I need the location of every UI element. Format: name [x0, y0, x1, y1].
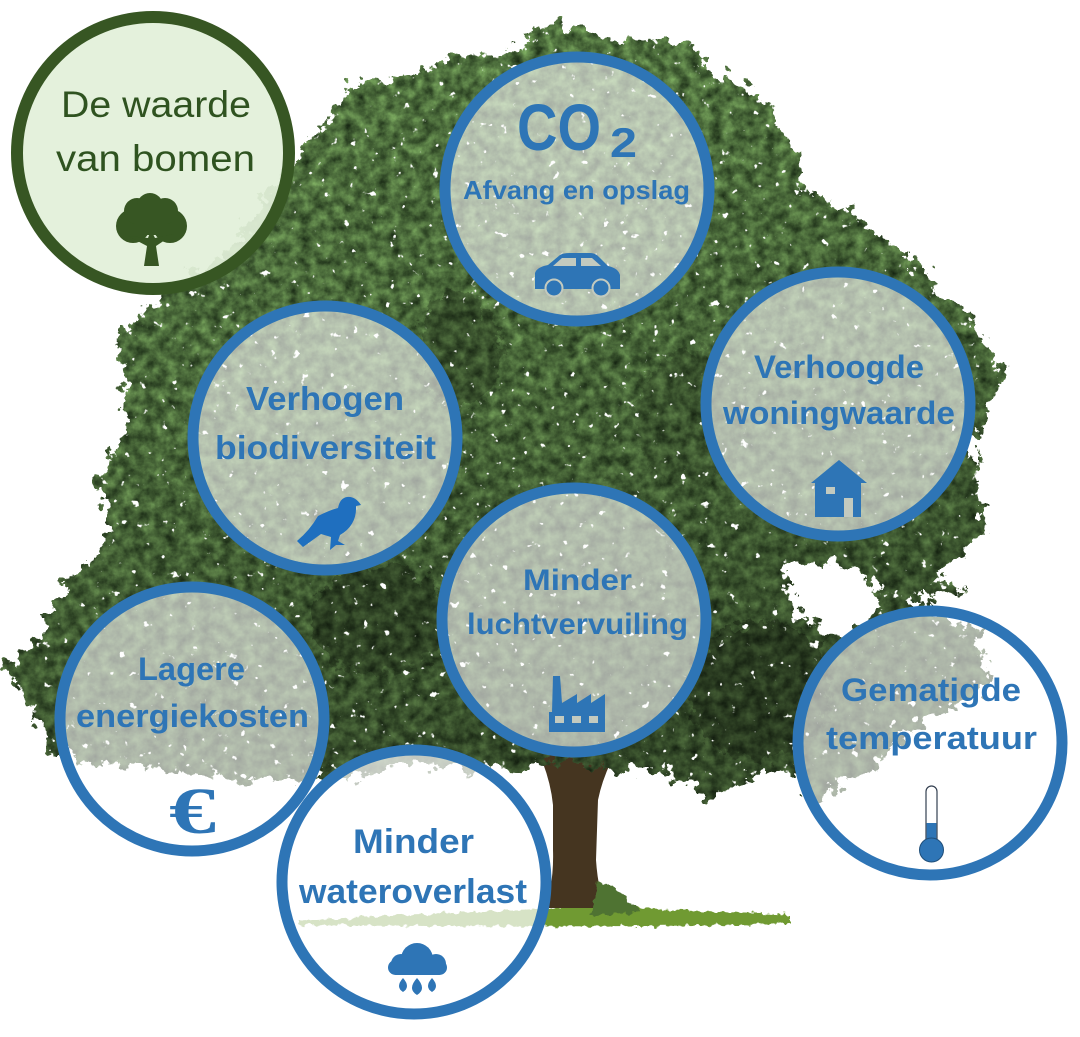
icon: rain cloud — [388, 943, 447, 995]
panel: Verhogen biodiversiteit — [193, 306, 457, 570]
label: temperatuur — [826, 720, 1037, 756]
label: Gematigde — [841, 672, 1021, 708]
trunk — [535, 745, 618, 908]
title — [56, 84, 255, 179]
panel: Verhoogde woningwaarde — [706, 272, 970, 536]
grass — [298, 896, 790, 926]
panel: CO2 afvang en opslag — [445, 57, 709, 321]
title: De waarde — [61, 84, 251, 125]
label — [215, 380, 436, 466]
label: Lagere — [138, 651, 245, 687]
label: luchtvervuiling — [467, 608, 688, 641]
label — [722, 349, 955, 431]
icon: tree — [116, 193, 187, 266]
label — [76, 651, 309, 734]
panel: Lagere energiekosten — [60, 587, 324, 851]
base shrub — [592, 882, 642, 916]
panel: Minder luchtvervuiling — [442, 488, 706, 752]
label: Minder — [523, 564, 632, 597]
title: van bomen — [56, 138, 255, 179]
panel: Gematigde temperatuur — [798, 611, 1062, 875]
label — [298, 823, 527, 911]
label: Minder — [353, 823, 474, 861]
label: energiekosten — [76, 698, 309, 734]
label — [826, 672, 1037, 756]
label: wateroverlast — [298, 873, 527, 911]
label: woningwaarde — [722, 395, 955, 431]
label: biodiversiteit — [215, 429, 436, 466]
icon: thermometer — [920, 786, 944, 862]
heading: CO2: CO — [517, 90, 601, 164]
subscript 2: 2 — [610, 119, 637, 166]
label: Afvang en opslag — [463, 175, 690, 205]
icon: house — [811, 460, 867, 517]
icon: bird — [297, 497, 361, 550]
label: Verhoogde — [754, 349, 924, 385]
canopy — [4, 24, 1003, 802]
panel: De waarde van bomen — [17, 17, 289, 289]
panel: Minder wateroverlast — [282, 750, 546, 1014]
icon: car — [535, 253, 620, 296]
icon: factory — [549, 676, 605, 732]
label — [467, 564, 688, 641]
dark branch shadows — [310, 565, 450, 675]
icon: euro: € — [169, 775, 216, 848]
label: Verhogen — [246, 380, 404, 417]
